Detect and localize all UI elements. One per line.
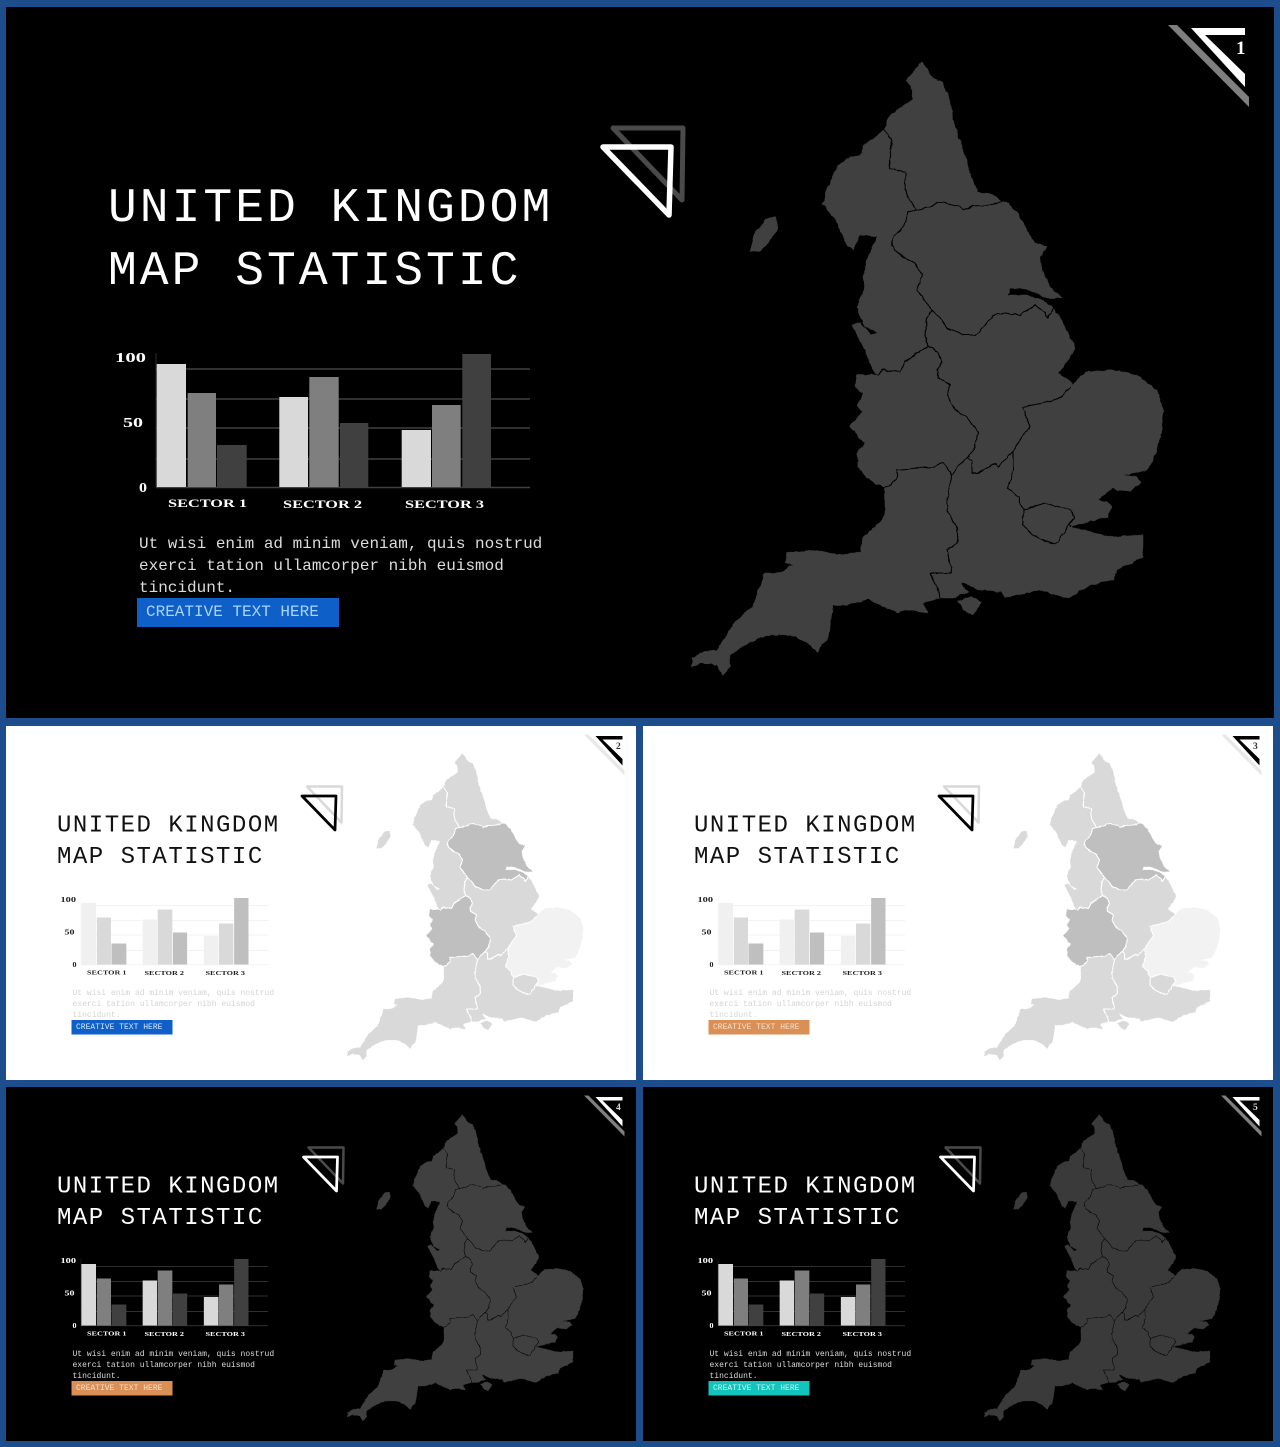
text block: exerci tation ullamcorper nibh euismod — [72, 1000, 255, 1009]
bar chart: 100 — [60, 896, 77, 904]
title: MAP STATISTIC — [57, 844, 264, 871]
text block: Ut wisi enim ad minim veniam, quis nostrud — [72, 989, 274, 998]
bar chart: 0 — [710, 1322, 714, 1330]
bar chart: 100 — [698, 1257, 714, 1265]
text block: exerci tation ullamcorper nibh euismod — [139, 557, 504, 575]
title: MAP STATISTIC — [108, 245, 521, 299]
panel: slide 3 light orange button — [643, 726, 1273, 1080]
callout button — [72, 1381, 172, 1396]
icon: corner page marker 5: 5 — [1253, 1103, 1258, 1113]
panel: slide 4 dark orange button — [6, 1087, 636, 1441]
bar chart: 0 — [72, 1322, 77, 1330]
map: England regions — [984, 754, 1220, 1060]
icon: corner page marker 1 — [1168, 25, 1249, 107]
bar chart: 0 — [710, 961, 714, 969]
bar chart: 0 — [72, 961, 77, 969]
title: MAP STATISTIC — [694, 1205, 901, 1232]
panel: slide 5 dark teal button — [643, 1087, 1273, 1441]
bar chart — [115, 351, 530, 511]
bar chart: SECTOR 2 — [782, 971, 821, 977]
icon: corner page marker 3 — [1221, 734, 1262, 776]
panel: main slide 1 — [6, 7, 1274, 718]
title: UNITED KINGDOM — [57, 812, 280, 840]
title: MAP STATISTIC — [57, 1205, 264, 1232]
bar chart — [60, 896, 268, 977]
text block: Ut wisi enim ad minim veniam, quis nostrud — [710, 989, 911, 998]
callout button: CREATIVE TEXT HERE — [76, 1023, 163, 1032]
bar chart: SECTOR 1 — [87, 1332, 126, 1338]
bar chart: SECTOR 3 — [206, 1332, 245, 1338]
icon: corner page marker 2: 2 — [616, 742, 621, 752]
bar chart: SECTOR 2 — [283, 497, 362, 511]
title: UNITED KINGDOM — [108, 182, 553, 236]
bar chart: 0 — [139, 481, 147, 496]
icon: double triangle — [940, 1148, 980, 1191]
text block: tincidunt. — [72, 1372, 121, 1381]
icon: corner page marker 5 — [1221, 1096, 1262, 1136]
icon: corner page marker 4: 4 — [616, 1103, 621, 1113]
bar chart: 50 — [64, 1290, 75, 1298]
bar chart — [698, 1257, 905, 1338]
bar chart: SECTOR 3 — [842, 971, 882, 977]
callout button — [137, 598, 339, 627]
map: England regions — [692, 62, 1163, 675]
callout button: CREATIVE TEXT HERE — [713, 1023, 800, 1032]
bar chart: 100 — [115, 351, 146, 366]
icon: corner page marker 4 — [584, 1096, 624, 1136]
bar chart: SECTOR 2 — [782, 1332, 821, 1338]
bar chart: SECTOR 3 — [206, 971, 245, 977]
text block: tincidunt. — [710, 1011, 758, 1020]
bar chart: 50 — [702, 928, 712, 936]
title: MAP STATISTIC — [694, 844, 901, 871]
bar chart: SECTOR 3 — [405, 497, 484, 511]
icon: double triangle — [603, 128, 683, 215]
title: UNITED KINGDOM — [694, 1174, 917, 1200]
text block: Ut wisi enim ad minim veniam, quis nostrud — [72, 1350, 274, 1359]
text block: tincidunt. — [139, 579, 235, 597]
bar chart: 50 — [123, 416, 143, 431]
bar chart: SECTOR 1 — [87, 970, 126, 976]
panel: slide 2 light blue button — [6, 726, 636, 1080]
bar chart: SECTOR 2 — [144, 971, 184, 977]
text block: Ut wisi enim ad minim veniam, quis nostrud — [139, 535, 542, 553]
callout button — [72, 1020, 172, 1034]
bar chart: 50 — [702, 1290, 712, 1298]
text block: tincidunt. — [710, 1372, 758, 1381]
map: England regions — [984, 1114, 1220, 1421]
callout button: CREATIVE TEXT HERE — [713, 1384, 800, 1393]
callout button: CREATIVE TEXT HERE — [146, 603, 319, 621]
bar chart — [698, 896, 905, 977]
bar chart: SECTOR 2 — [144, 1332, 184, 1338]
bar chart: 50 — [64, 928, 75, 936]
map: England regions — [348, 1114, 583, 1421]
callout button — [708, 1381, 810, 1396]
bar chart: SECTOR 1 — [168, 496, 247, 510]
text block: tincidunt. — [72, 1011, 121, 1020]
title: UNITED KINGDOM — [57, 1174, 280, 1200]
bar chart — [60, 1257, 268, 1338]
callout button: CREATIVE TEXT HERE — [76, 1384, 163, 1393]
title: UNITED KINGDOM — [694, 812, 917, 840]
icon: corner page marker 1: 1 — [1236, 38, 1246, 59]
icon: corner page marker 3: 3 — [1253, 742, 1258, 752]
map: England regions — [348, 754, 583, 1060]
icon: double triangle — [304, 1148, 344, 1191]
bar chart: SECTOR 3 — [842, 1332, 882, 1338]
text block: exerci tation ullamcorper nibh euismod — [710, 1361, 892, 1370]
bar chart: SECTOR 1 — [724, 1332, 764, 1338]
icon: corner page marker 2 — [584, 734, 624, 776]
bar chart: SECTOR 1 — [724, 970, 764, 976]
bar chart: 100 — [698, 896, 714, 904]
icon: double triangle — [939, 786, 979, 830]
callout button — [708, 1020, 810, 1034]
text block: exerci tation ullamcorper nibh euismod — [72, 1361, 255, 1370]
bar chart: 100 — [60, 1257, 77, 1265]
text block: exerci tation ullamcorper nibh euismod — [710, 1000, 892, 1009]
icon: double triangle — [302, 786, 342, 830]
text block: Ut wisi enim ad minim veniam, quis nostrud — [710, 1350, 911, 1359]
